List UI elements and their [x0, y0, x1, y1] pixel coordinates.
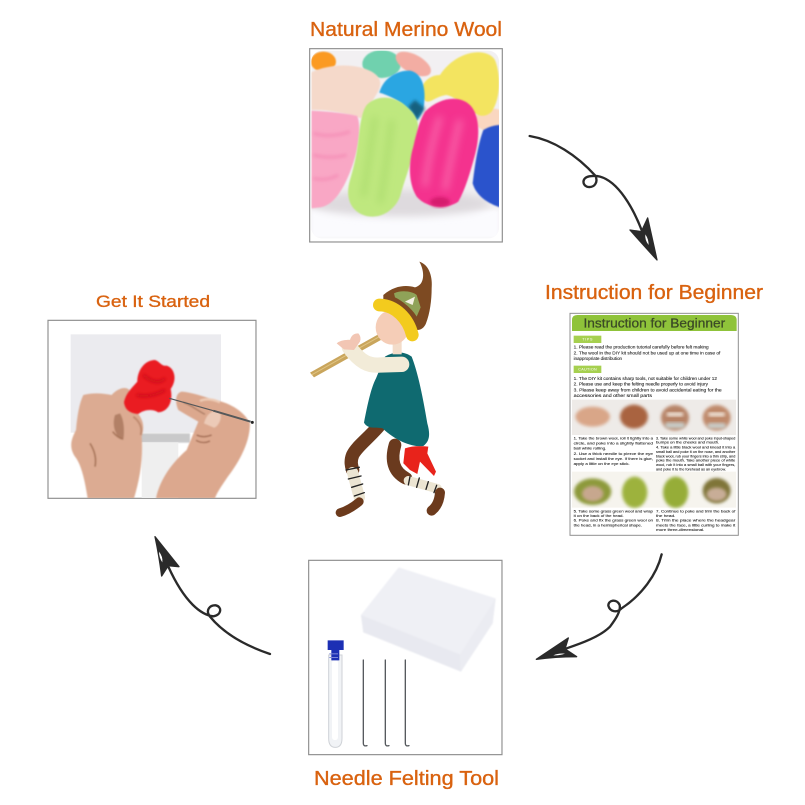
- red wool: [124, 360, 175, 414]
- brown hat: [383, 262, 432, 330]
- caution section: 3. Please keep away from children to avoid accidental eating for the: [574, 387, 722, 392]
- step text 3-4: small ball and poke it on the nose, and another: [656, 449, 736, 454]
- heading: Needle Felting Tool: Needle Felting Tool: [314, 768, 499, 790]
- wool: pink: [311, 111, 359, 208]
- face: [376, 310, 409, 345]
- hand: [337, 333, 361, 350]
- step photos row 2: [572, 472, 736, 508]
- step text 5-6: it on the back of the head.: [574, 513, 624, 518]
- step text 7-8: more three-dimensional.: [656, 527, 704, 532]
- step text 5-6: the head, in a hemispherical shape.: [574, 522, 642, 527]
- wool: sky blue: [379, 71, 425, 121]
- central felt doll: [310, 262, 440, 513]
- caution section: accessories and other small parts: [574, 393, 653, 398]
- wool: hot pink: [410, 99, 478, 207]
- step text 3-4: 3. Take some white wool and poke input-shaped: [656, 435, 735, 440]
- step text 1-2: apply a little on the eye stick.: [574, 461, 630, 466]
- foam block: [361, 567, 496, 672]
- step text 3-4: [656, 435, 736, 471]
- teal tunic: [364, 353, 429, 446]
- panel: instruction sheet: [570, 313, 738, 535]
- glass tube: [328, 640, 344, 747]
- arrow: instruction to tools: [536, 554, 662, 659]
- shadows under wool: [310, 190, 490, 217]
- step text 5-6: [574, 508, 654, 527]
- step text 7-8: 7. Continue to poke and trim the back of: [656, 508, 736, 513]
- heading: Get It Started: Get It Started: [96, 292, 210, 311]
- right hand: [156, 392, 250, 498]
- front foot: [340, 502, 359, 513]
- step text 3-4: and poke it to the forehead as an eyebrow.: [656, 466, 726, 471]
- step text 1-2: ball while rolling.: [574, 445, 606, 450]
- step text 7-8: the head.: [656, 513, 675, 518]
- panel: get it started photo: [48, 320, 256, 499]
- tips section: TIPS: [582, 338, 593, 342]
- wool: salmon: [394, 51, 432, 77]
- step text 5-6: 5. Take some grass green wool and wrap: [574, 508, 654, 513]
- step text 1-2: socket and install the eye. If there is glue,: [574, 456, 653, 461]
- flute: [310, 333, 383, 377]
- sheet title bar: Instruction for Beginner: [583, 316, 726, 331]
- neck: [393, 342, 402, 354]
- heading: Natural Merino Wool: Natural Merino Wool: [310, 19, 502, 41]
- felting needles: [363, 660, 409, 746]
- wool: royal blue: [473, 125, 500, 207]
- needle: [169, 398, 213, 411]
- step text 1-2: 2. Use a thick needle to pierce the eye: [574, 451, 654, 456]
- step text 1-2: [574, 435, 654, 466]
- panel: needle felting tool photo: [309, 560, 502, 755]
- step text 1-2: 1. Take the brown wool, roll it tightly into a: [574, 435, 654, 440]
- step text 3-4: poke the mouth. Take another piece of white: [656, 458, 736, 463]
- arrow: wool to instruction: [530, 136, 657, 260]
- back leg: [393, 445, 406, 478]
- arrow: tools to get started: [155, 537, 270, 654]
- tips section: 2. The wool in the DIY kit should not be used up at one time in case of: [574, 350, 721, 355]
- tips section: inappropriate distribution: [574, 356, 622, 361]
- white sleeve: [349, 347, 402, 365]
- step text 3-4: bumps on the cheeks and mouth.: [656, 439, 719, 444]
- wool: mint: [362, 50, 401, 78]
- step text 7-8: meets the face, a little curling to make it: [656, 522, 736, 527]
- step text 3-4: wool, rub it into a small ball with your fingers,: [656, 462, 735, 467]
- back foot: [432, 493, 440, 511]
- foam sheet: [71, 334, 221, 433]
- step text 5-6: 6. Poke and fix the grass green wool on: [574, 518, 653, 523]
- panel: merino wool photo: [310, 47, 508, 242]
- wool: yellow: [421, 52, 499, 116]
- heading: Instruction for Beginner: Instruction for Beginner: [545, 282, 763, 304]
- hat green decoration: [394, 291, 421, 317]
- wool: light peach right: [476, 108, 499, 130]
- front leg: [351, 427, 378, 470]
- step photos row 1: [572, 400, 736, 435]
- wool: orange: [311, 52, 336, 72]
- wool: lime green: [348, 98, 418, 217]
- tips section: 1. Please read the production tutorial carefully before felt making: [574, 345, 709, 350]
- yellow hair: [379, 305, 412, 335]
- step text 1-2: circle, and poke into a slightly flattened: [574, 440, 653, 445]
- caution section: 1. The DIY kit contains sharp tools, not suitable for children under 12: [574, 376, 717, 381]
- step text 7-8: 8. Trim the place where the headgear: [656, 518, 736, 523]
- step text 3-4: black wool, rub your fingers into a thin strip, and: [656, 453, 735, 458]
- tips section: [574, 336, 721, 361]
- caution section: 2. Please use and keep the felting needle properly to avoid injury: [574, 382, 709, 387]
- step text 7-8: [656, 508, 736, 532]
- left hand: [71, 388, 143, 498]
- caution section: CAUTION: [578, 368, 597, 372]
- caution section: [574, 366, 722, 398]
- wool: peach: [311, 65, 380, 118]
- red tassels: [403, 446, 436, 476]
- step text 3-4: 4. Take a little black wool and knead it into a: [656, 445, 736, 450]
